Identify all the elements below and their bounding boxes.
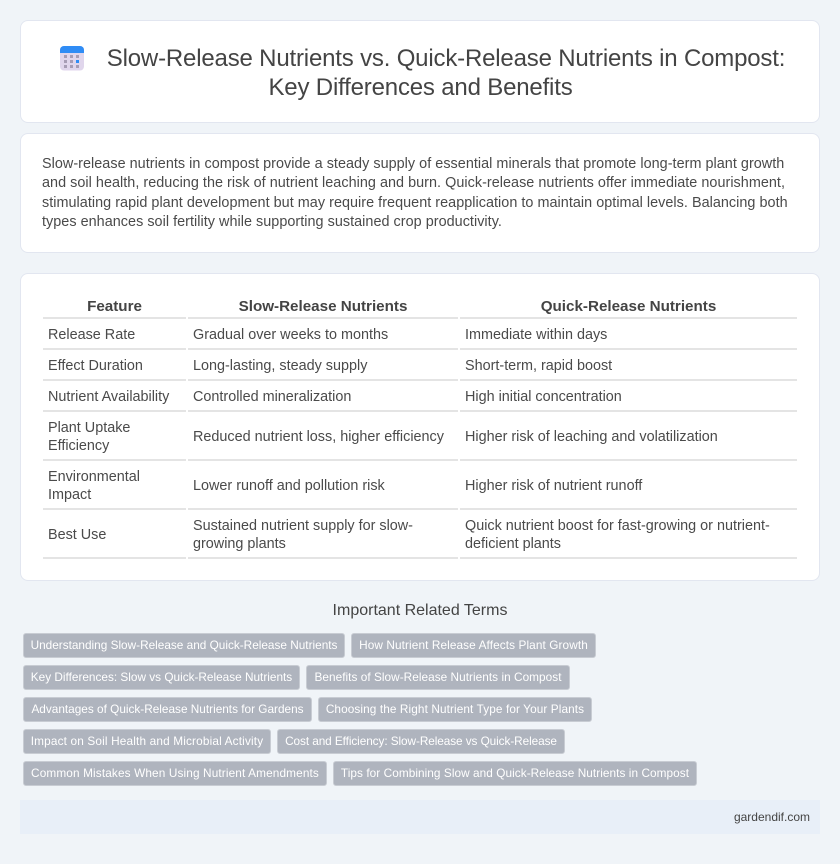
row: Best Use, slow: Sustained nutrient supply for slow- [193,518,413,534]
chip [333,761,697,786]
row: Release Rate, slow: Gradual over weeks to months [193,327,388,343]
row: Effect Duration: Effect Duration [48,358,143,374]
row: Release Rate: Release Rate [48,327,135,343]
row: Environmental Impact [48,469,140,503]
header card [20,20,820,123]
row: Effect Duration, slow: Long-lasting, steady supply [193,358,367,374]
chip: Cost and Efficiency: Slow-Release vs Quick-Release [285,734,557,748]
chip [318,697,592,722]
chip [23,633,345,658]
chip: Choosing the Right Nutrient Type for Your Plants [326,702,584,716]
intro text: stimulating rapid plant development but may require frequent reapplication to maintain optimal levels. Balancing both [42,195,788,211]
intro text: Slow-release nutrients in compost provide a steady supply of essential minerals that promote long-term plant growth [42,156,784,172]
chip: Key Differences: Slow vs Quick-Release Nutrients [31,670,292,684]
row: Nutrient Availability, slow: Controlled mineralization [193,389,351,405]
row: Environmental Impact, slow: Lower runoff and pollution risk [193,478,385,494]
intro text [42,156,788,230]
row: Environmental Impact, quick: Higher risk of nutrient runoff [465,478,642,494]
chip: Tips for Combining Slow and Quick-Release Nutrients in Compost [341,766,689,780]
row: Release Rate, quick: Immediate within days [465,327,607,343]
chip: Benefits of Slow-Release Nutrients in Compost [314,670,562,684]
intro text: and soil health, reducing the risk of nutrient leaching and burn. Quick-release nutrients offer immediate nourishment, [42,175,785,191]
intro text: types enhances soil fertility while supporting sustained crop productivity. [42,214,502,230]
row: Effect Duration, quick: Short-term, rapid boost [465,358,612,374]
chip: How Nutrient Release Affects Plant Growth [359,638,588,652]
title [107,45,785,101]
row: Best Use, slow [193,518,413,552]
row: Nutrient Availability, quick: High initial concentration [465,389,622,405]
title: Slow-Release Nutrients vs. Quick-Release Nutrients in Compost: [107,45,785,72]
chip [23,729,271,754]
row: Best Use, slow: growing plants [193,536,286,552]
chip [277,729,565,754]
row: Nutrient Availability: Nutrient Availability [48,389,169,405]
chip: Advantages of Quick-Release Nutrients for Gardens [31,702,304,716]
related terms heading: Important Related Terms [333,602,507,619]
row: Best Use, quick: deficient plants [465,536,561,552]
chip: Understanding Slow-Release and Quick-Release Nutrients [31,638,337,652]
row: Plant Uptake Efficiency, slow: Reduced nutrient loss, higher efficiency [193,429,444,445]
chip: Common Mistakes When Using Nutrient Amendments [31,766,319,780]
comparison table card [20,273,820,581]
table header: Feature: Feature [87,298,142,315]
table header: Slow-Release Nutrients: Slow-Release Nutrients [239,298,407,315]
title: Key Differences and Benefits [268,74,573,101]
row: Environmental Impact: Environmental [48,469,140,485]
footer bar [20,800,820,834]
row: Plant Uptake Efficiency [48,420,130,454]
table header: Quick-Release Nutrients: Quick-Release Nutrients [541,298,716,315]
chip [23,665,300,690]
related terms chips [23,633,697,786]
footer source: gardendif.com [734,810,810,824]
row: Best Use, quick [465,518,770,552]
chip [306,665,570,690]
row: Plant Uptake Efficiency: Efficiency [48,438,109,454]
row: Environmental Impact: Impact [48,487,91,503]
row: Best Use: Best Use [48,527,106,543]
chip [23,761,327,786]
row: Plant Uptake Efficiency: Plant Uptake [48,420,130,436]
chip [351,633,596,658]
intro card [20,133,820,253]
icon: calendar [60,46,84,70]
row: Plant Uptake Efficiency, quick: Higher risk of leaching and volatilization [465,429,718,445]
chip [23,697,312,722]
chip: Impact on Soil Health and Microbial Activity [31,734,263,748]
row: Best Use, quick: Quick nutrient boost for fast-growing or nutrient- [465,518,770,534]
